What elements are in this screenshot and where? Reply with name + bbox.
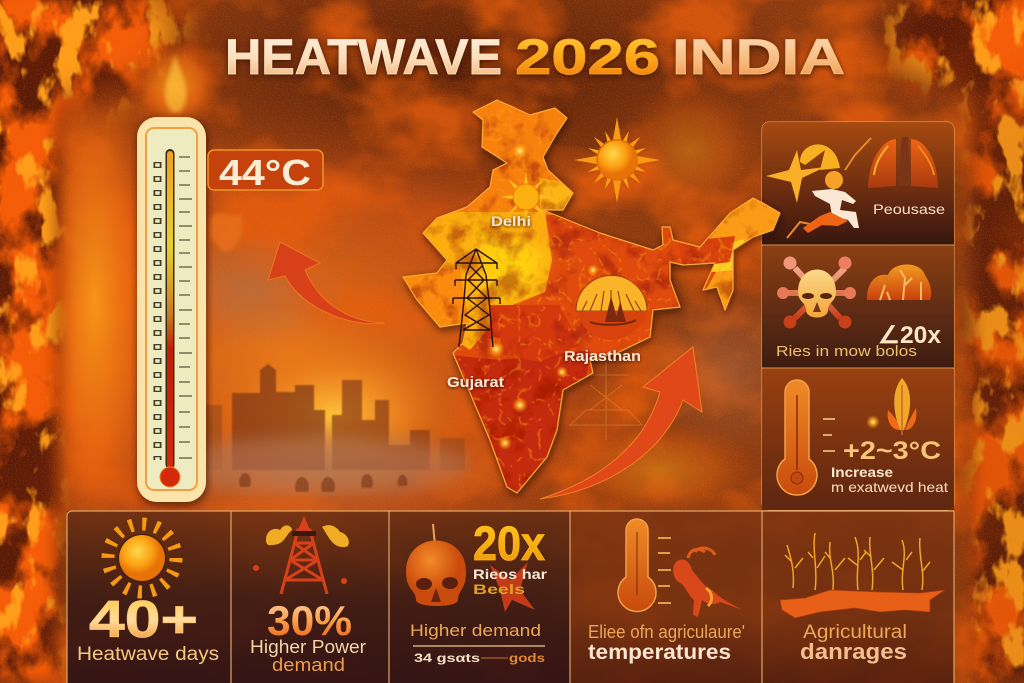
icon: half sun (800, 144, 840, 170)
panel: agricultural damages (762, 511, 954, 683)
map label: Gujarat: Gujarat (447, 374, 504, 391)
map zone: northeast gold (706, 198, 780, 308)
icon: sun over Delhi (491, 162, 561, 232)
label: rises: Rieos har (473, 566, 548, 582)
icon: lungs (868, 137, 938, 188)
bottom stats panel (67, 511, 954, 683)
icon: orange skull (406, 524, 466, 606)
map zone: Gujarat orange (404, 268, 470, 330)
map label: Delhi: Delhi (491, 213, 531, 229)
arrow: right curved up (540, 347, 702, 499)
panel: agricultural temperatures (570, 511, 762, 683)
right side panel (762, 122, 954, 510)
label: Increase: Increase (831, 464, 893, 480)
stat: 30%: 30% (267, 597, 352, 644)
map zone: northwest yellow belt (424, 212, 552, 350)
panel: 20x deaths (389, 511, 570, 683)
label: demand: demand (272, 655, 345, 675)
icon: dome with trees (576, 275, 647, 340)
title word: 2026: 2026 (515, 29, 660, 85)
thermometer tick marks (179, 157, 192, 458)
label: 20x: ∠20x (878, 322, 942, 349)
label: agriculture: Eliee ofn agriculaure' (588, 622, 745, 642)
panel: respiratory row (762, 122, 954, 245)
label: higher demand: Higher demand (410, 621, 541, 640)
map zone: northern orange states (456, 100, 566, 215)
panel: temperature row (762, 368, 954, 510)
icon: leaping animal (673, 548, 743, 617)
temperature badge (208, 150, 323, 193)
map of India (395, 95, 790, 500)
label: heatwave days: Heatwave days (77, 644, 219, 665)
label: beels: Beels (473, 581, 525, 597)
panel frame lines (67, 511, 954, 683)
label: Peousase: Peousase (873, 201, 945, 217)
label: rises: Ries in mow bolos (776, 343, 917, 360)
thermometer scale digits (154, 162, 162, 460)
icon: transmission tower (453, 249, 500, 347)
icon: sun (108, 524, 176, 592)
icon: burning bush (867, 264, 931, 300)
panel: power demand (231, 511, 389, 683)
label: higher power: Higher Power (250, 637, 366, 657)
title (225, 29, 845, 85)
icon: red spikes (490, 562, 535, 612)
label: small caption: 34 gsαts (414, 651, 480, 665)
icon: power tower (253, 516, 349, 594)
icon: zigzag lines (787, 138, 871, 238)
icon: tick marks (658, 538, 671, 603)
map label: Rajasthan: Rajasthan (564, 348, 641, 365)
faint pylon behind map (570, 360, 642, 440)
icon: fallen logs (780, 590, 945, 618)
label: +2~3°C: +2~3°C (843, 437, 941, 465)
label: extended heat: m exatwevd heat (831, 479, 948, 495)
map zone: assam red strip (678, 236, 735, 264)
stat: 40+: 40+ (89, 591, 198, 649)
thermometer (137, 117, 206, 502)
label: agricultural: Agricultural (803, 622, 907, 643)
title word: HEATWAVE: HEATWAVE (225, 29, 502, 85)
map zone: Delhi yellow (540, 178, 572, 212)
label: damages: danrages (800, 639, 907, 664)
icon: running figure (803, 171, 859, 233)
city skyline in haze (170, 364, 470, 493)
icon: tick marks (823, 419, 835, 451)
panel: heatwave days (67, 511, 231, 683)
icon: sun above map (570, 113, 664, 207)
icon: small thermometer (777, 380, 817, 495)
icon: skull and bones (777, 256, 856, 328)
map zone: southern deep red (450, 350, 590, 500)
title word: INDIA: INDIA (672, 29, 845, 85)
panel: mortality row (762, 245, 954, 368)
icon: wheat leaf (888, 378, 916, 435)
stat: 20x: 20x (473, 518, 545, 571)
label: gods: gods (509, 651, 545, 665)
icon: starburst (766, 150, 825, 203)
label: temperatures: temperatures (588, 641, 731, 664)
icon: withered crops (785, 533, 930, 590)
arrow: left curved up (268, 242, 385, 324)
icon: thermometer (618, 519, 656, 611)
temperature badge: 44°C (219, 152, 311, 193)
